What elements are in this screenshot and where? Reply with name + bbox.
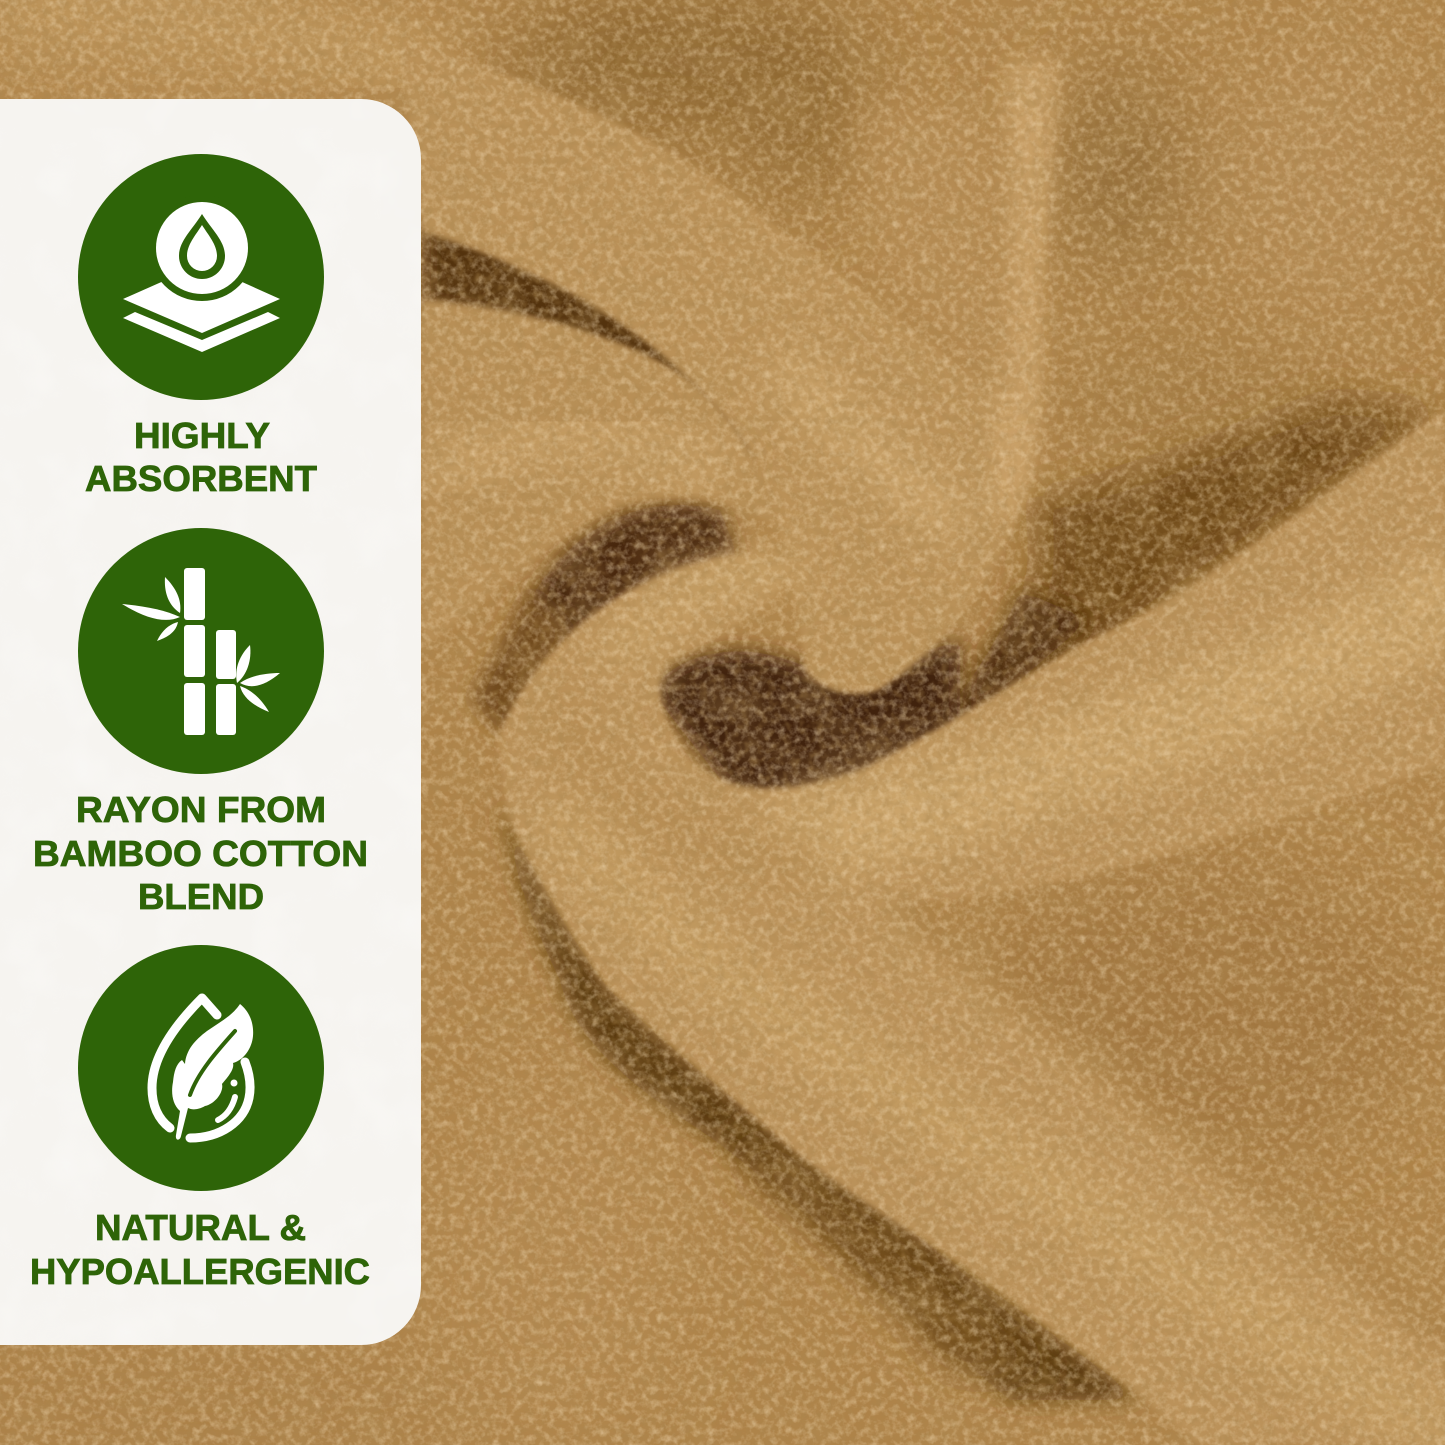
heading: highly absorbent (85, 415, 317, 499)
shadow: central pocket (650, 640, 960, 810)
icon: bamboo (78, 528, 324, 774)
upper left band continuation (0, 10, 440, 70)
heading: highly absorbent: ABSORBENT (85, 458, 317, 499)
top band fold (400, 40, 1058, 694)
icon: absorbent layers with water drop (78, 154, 324, 400)
soft ridge between lower folds (900, 905, 1445, 1340)
heading: rayon from bamboo cotton blend: BAMBOO COTTON (33, 833, 368, 874)
heading: natural and hypoallergenic (30, 1207, 370, 1292)
shadow: under right band (950, 400, 1445, 725)
heading: rayon from bamboo cotton blend (33, 789, 368, 917)
shadow: lower fold crease (500, 800, 1140, 1400)
heading: natural and hypoallergenic: HYPOALLERGENIC (30, 1251, 370, 1292)
band highlights (560, 570, 1445, 1430)
heading: highly absorbent: HIGHLY (134, 415, 270, 456)
icon: natural leaf and drop (78, 945, 324, 1191)
heading: rayon from bamboo cotton blend: RAYON FROM (76, 789, 326, 830)
panel: features (0, 99, 421, 1345)
middle left fold (422, 300, 780, 650)
swirl and lower fold (497, 410, 1445, 1445)
heading: rayon from bamboo cotton blend: BLEND (138, 876, 264, 917)
shadow: under top fold (422, 215, 750, 470)
shadow: upper left pocket (530, 505, 740, 650)
heading: natural and hypoallergenic: NATURAL & (95, 1207, 306, 1248)
